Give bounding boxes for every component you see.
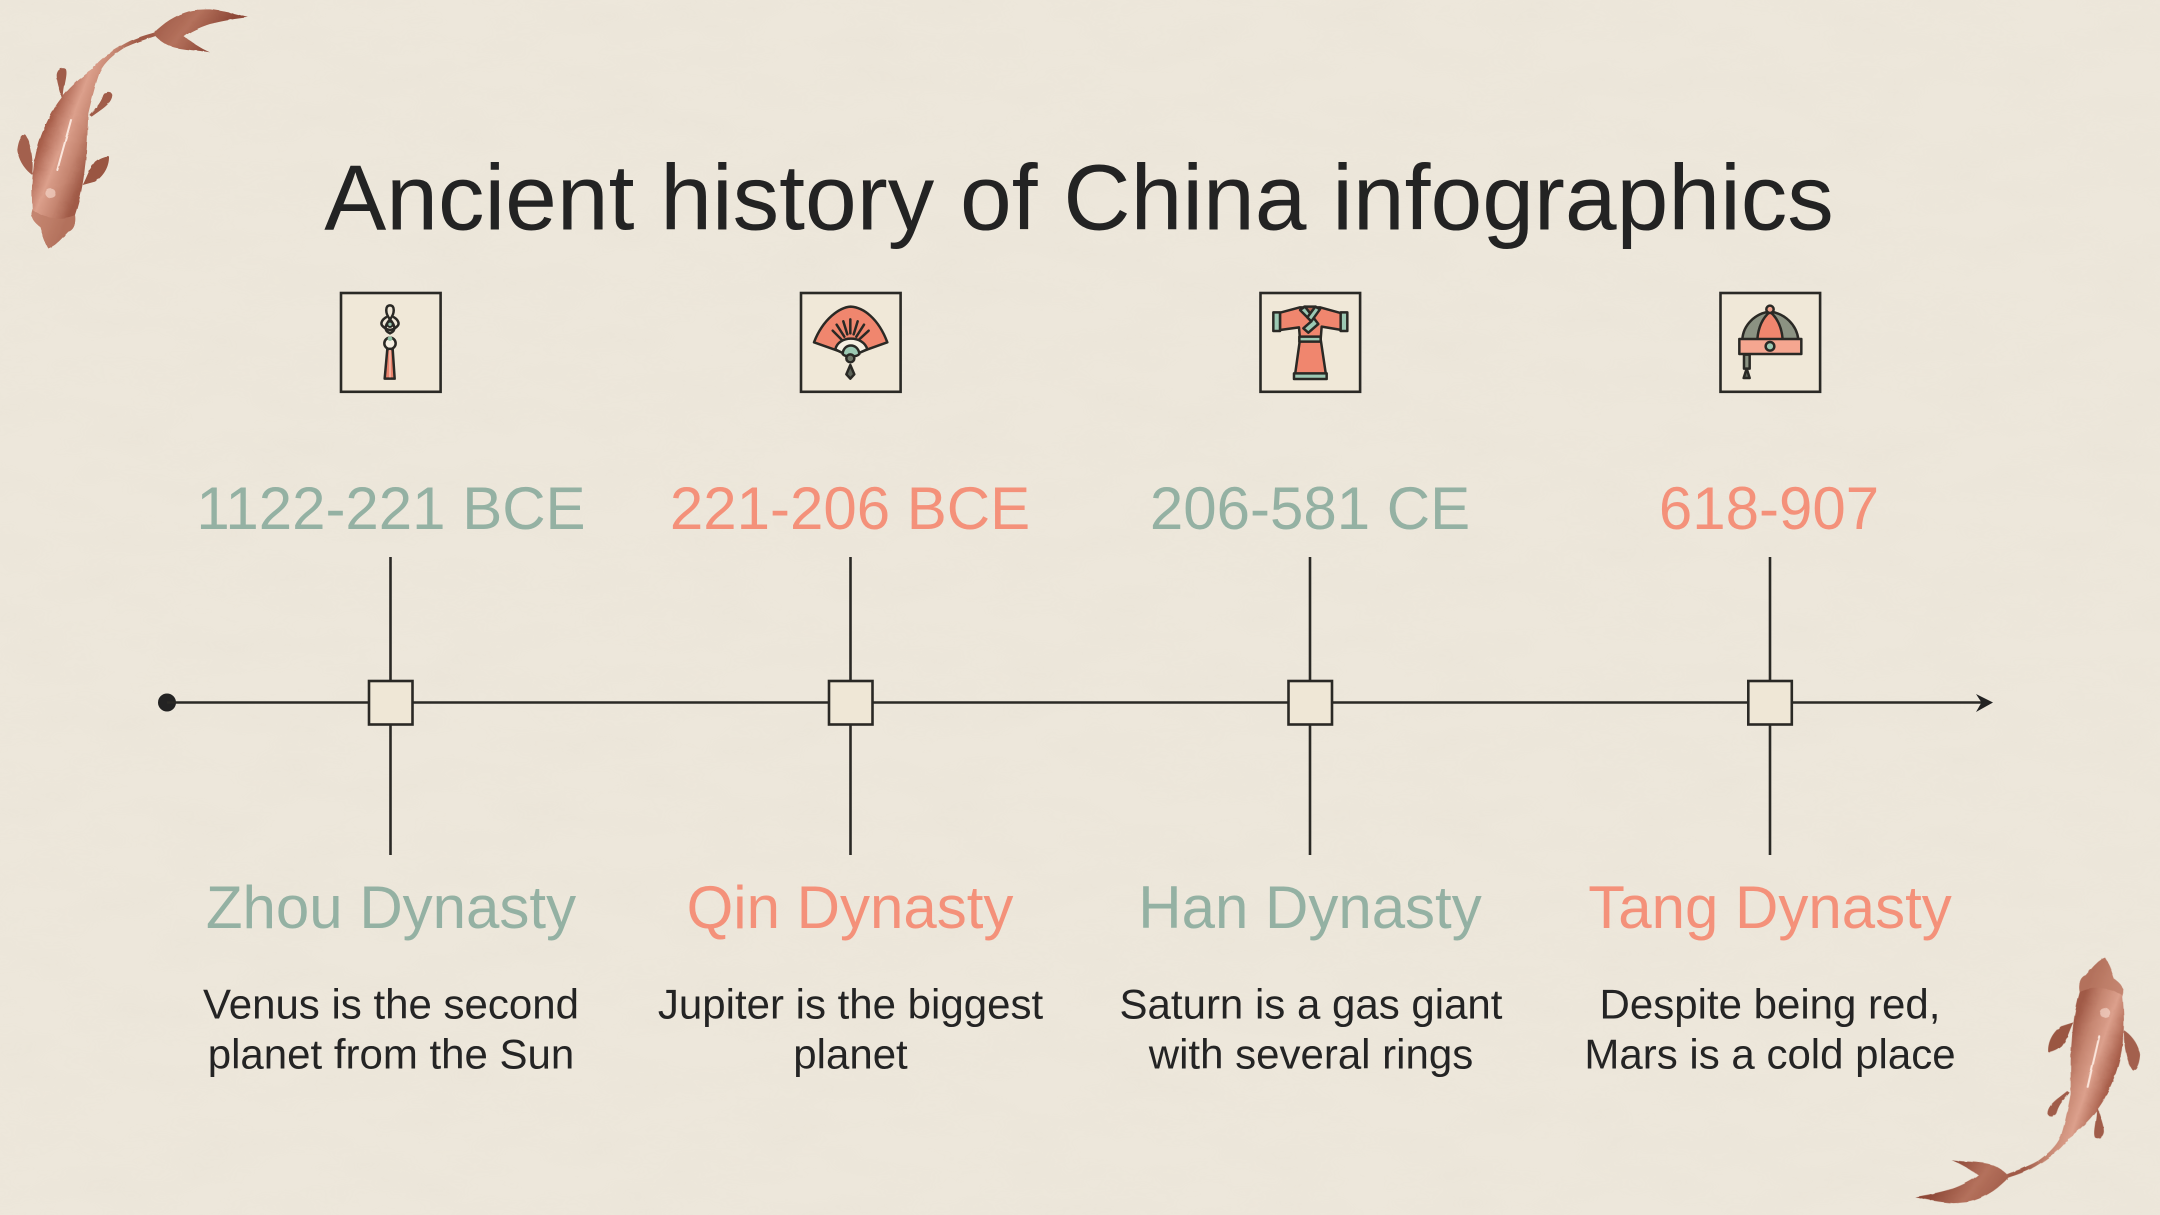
timeline line (167, 701, 1990, 704)
description: Venus is the second (203, 980, 579, 1028)
dynasty name: Tang Dynasty (1588, 874, 1952, 941)
title: Ancient history of China infographics (324, 145, 1834, 249)
milestone 1: Zhou Dynasty (196, 293, 586, 1078)
date: 206-581 CE: 206-581 CE (1150, 475, 1470, 542)
timeline marker square (369, 681, 412, 724)
description: planet from the Sun (208, 1030, 574, 1078)
dynasty name: Zhou Dynasty (206, 874, 576, 941)
date: 618-907: 618-907 (1659, 475, 1879, 542)
connector stem (389, 557, 392, 855)
dynasty name: Han Dynasty (1138, 874, 1482, 941)
decorative koi fish, bottom right (1905, 956, 2146, 1205)
date: 221-206 BCE: 221-206 BCE (670, 475, 1030, 542)
connector stem (849, 557, 852, 855)
timeline start dot (158, 694, 176, 712)
description: with several rings (1148, 1030, 1473, 1078)
milestone 4: Tang Dynasty (1584, 293, 1956, 1078)
date: 1122-221 BCE: 1122-221 BCE (196, 475, 586, 542)
icon: official hat (1720, 293, 1820, 392)
timeline arrowhead (1976, 694, 1993, 712)
connector stem (1769, 557, 1771, 855)
dynasty name: Qin Dynasty (687, 874, 1013, 941)
icon: tassel ornament (341, 293, 441, 392)
timeline axis (158, 694, 1993, 712)
timeline marker square (1748, 681, 1792, 724)
milestone 3: Han Dynasty (1120, 293, 1503, 1078)
description: Saturn is a gas giant (1120, 980, 1503, 1028)
timeline marker square (829, 681, 872, 724)
decorative koi fish, top left (17, 9, 248, 248)
description: Despite being red, (1600, 980, 1940, 1028)
milestone 2: Qin Dynasty (658, 293, 1043, 1078)
description: Jupiter is the biggest (658, 980, 1043, 1028)
description: planet (793, 1030, 908, 1078)
icon: folding fan (801, 293, 901, 392)
connector stem (1309, 557, 1311, 855)
description: Mars is a cold place (1584, 1030, 1956, 1078)
icon: robe (1260, 293, 1360, 392)
timeline marker square (1288, 681, 1332, 724)
